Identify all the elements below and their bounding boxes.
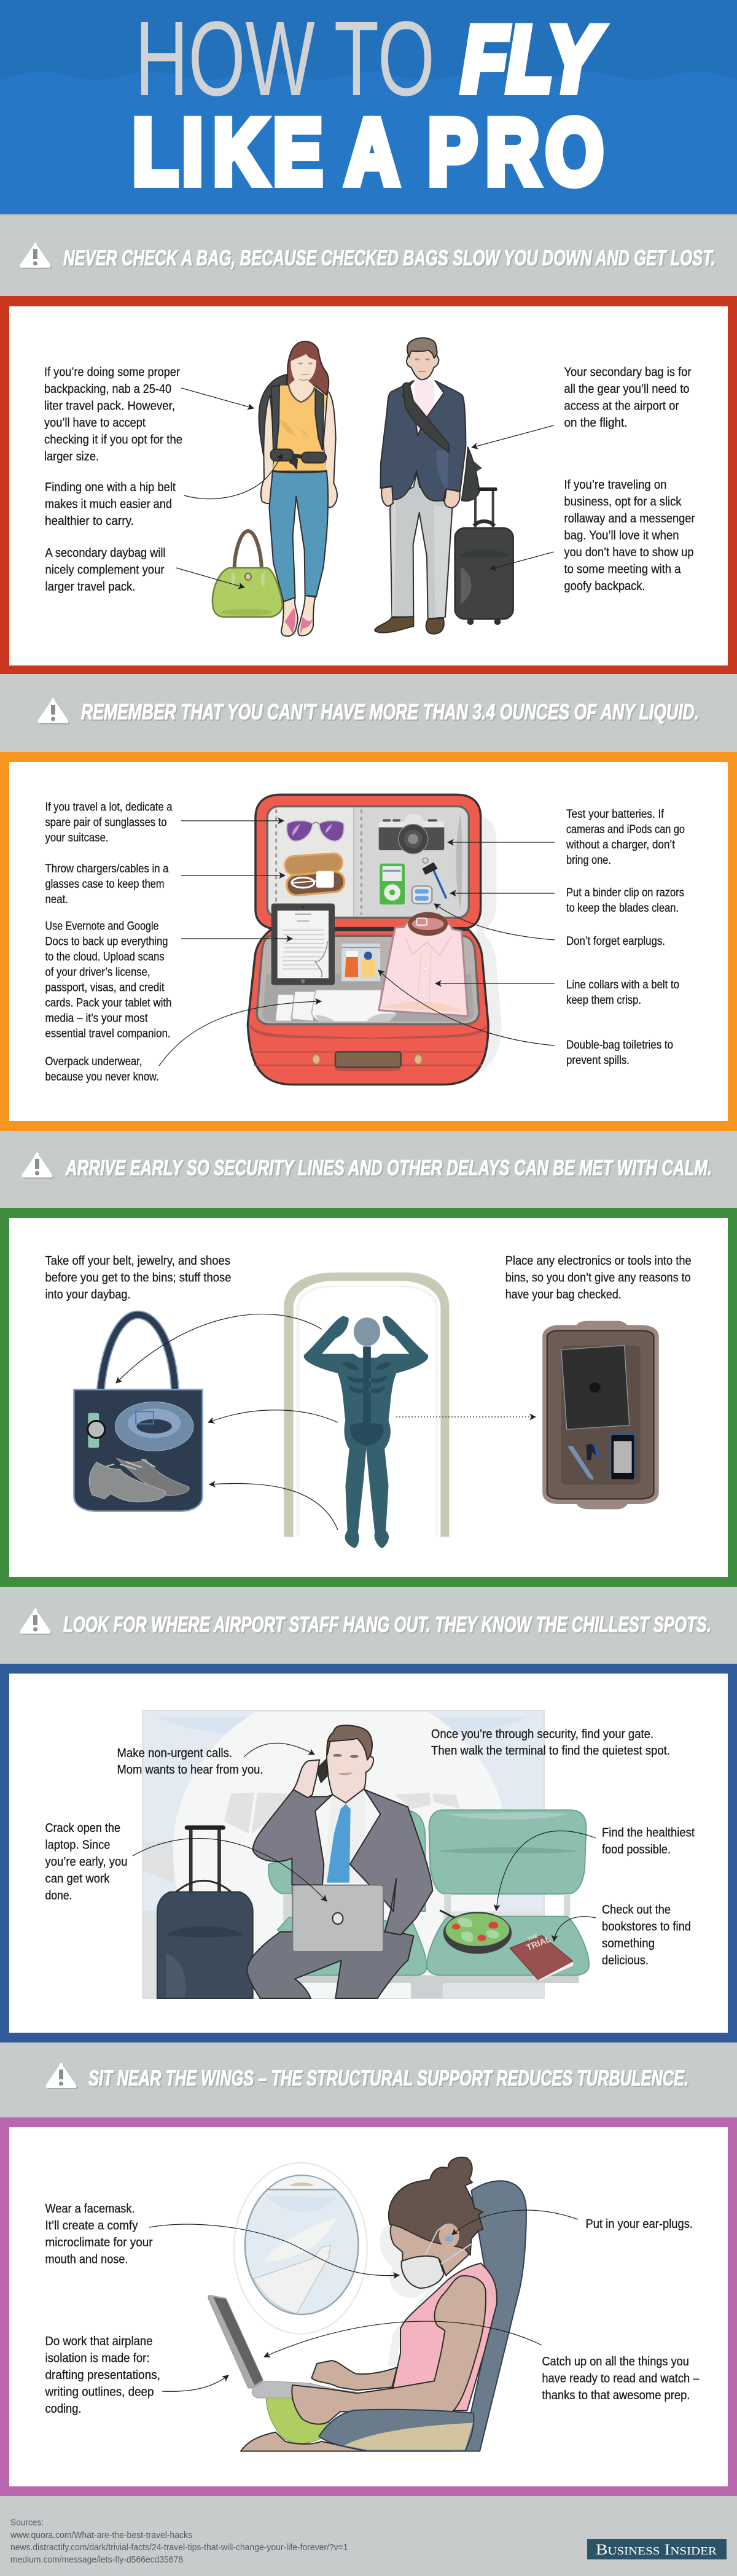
text: chargers tip: Throw chargers/cables in a: [45, 863, 169, 875]
text: sunglasses tip: If you travel a lot, dedicate a: [45, 801, 173, 814]
text: laptop tip: [45, 1821, 128, 1903]
text: cloud backup tip: media – it’s your most: [45, 1012, 148, 1025]
text: laptop tip: Crack open the: [45, 1821, 120, 1835]
text: secondary bag tip: access at the airport or: [564, 399, 679, 413]
text: rollaway tip: bag. You’ll love it when: [564, 529, 679, 543]
text: bookstore tip: something: [602, 1937, 655, 1950]
illustration: security tray with electronics: [542, 1321, 659, 1509]
logo: Business Insider: [587, 2539, 727, 2559]
text: phone calls tip: Mom wants to hear from you.: [117, 1763, 263, 1777]
icon: warning triangle: [20, 1608, 51, 1634]
text: backpack tip: checking it if you opt for the: [44, 433, 182, 447]
navy rollaway suitcase: [157, 1825, 253, 1998]
text: facemask tip: mouth and nose.: [45, 2253, 128, 2267]
book title text: TRIAL: [525, 1934, 552, 1952]
panel: never check a bag: [0, 296, 737, 674]
text: airplane work tip: drafting presentations,: [45, 2368, 160, 2382]
seats: [268, 1810, 589, 1998]
text: underwear tip: because you never know.: [45, 1071, 158, 1084]
text: cloud backup tip: Docs to back up everything: [45, 936, 168, 948]
text: healthy food tip: [602, 1826, 695, 1856]
text: rollaway tip: to some meeting with a: [564, 562, 681, 576]
arrows: panel three callouts: [116, 1314, 536, 1530]
text: airplane work tip: Do work that airplane: [45, 2335, 152, 2348]
text: electronics tip: bins, so you don’t give any reasons to: [505, 1271, 691, 1284]
text: facemask tip: Wear a facemask.: [45, 2202, 135, 2216]
icon: warning triangle: [45, 2063, 77, 2088]
text: collars tip: Line collars with a belt to: [566, 979, 679, 991]
text: bookstore tip: delicious.: [602, 1953, 649, 1967]
sources: medium.com/message/lets-fly-d566ecd35678: [10, 2555, 183, 2565]
text: backpack tip: backpacking, nab a 25-40: [44, 382, 171, 396]
text: find your gate tip: Once you’re through security, find your gate.: [431, 1728, 653, 1741]
text: binder clip tip: Put a binder clip on razors: [566, 886, 684, 899]
text: chargers tip: neat.: [45, 893, 68, 906]
text: catch up tip: thanks to that awesome prep.: [542, 2389, 690, 2402]
panel: terminal: [0, 1664, 737, 2043]
text: bookstore tip: bookstores to find: [602, 1920, 691, 1934]
title: [133, 0, 603, 203]
text: toiletries tip: Double-bag toiletries to: [566, 1039, 673, 1052]
icon: earplugs: [412, 886, 432, 904]
text: airplane work tip: isolation is made for:: [45, 2351, 150, 2365]
text: secondary bag tip: on the flight.: [564, 416, 628, 430]
text: backpack tip: If you’re doing some proper: [44, 366, 180, 379]
illustration: businessman with messenger bag: [375, 338, 513, 634]
text: airplane work tip: coding.: [45, 2402, 81, 2416]
text: toiletries tip: prevent spills.: [566, 1054, 630, 1067]
text: rollaway tip: rollaway and a messenger: [564, 512, 695, 526]
text: catch up tip: [542, 2355, 700, 2402]
text: belt jewelry shoes tip: into your daybag.: [45, 1288, 130, 1302]
panel: security: [0, 1208, 737, 1587]
text: daybag tip: [45, 546, 166, 594]
book title text: THE: [526, 1933, 539, 1942]
terminal window background: [142, 1710, 544, 1998]
arrows: panel five callouts: [149, 2210, 578, 2391]
text: binder clip tip: [566, 886, 684, 915]
text: backpack tip: liter travel pack. However,: [44, 399, 175, 413]
arrows: panel four callouts: [133, 1743, 596, 1941]
text: catch up tip: Catch up on all the things you: [542, 2355, 689, 2368]
text: secondary bag tip: all the gear you’ll need to: [564, 382, 689, 396]
text: rollaway tip: If you’re traveling on: [564, 478, 667, 492]
illustration: open suitcase: [248, 794, 502, 1085]
illustration: scanned skeleton figure: [304, 1316, 428, 1548]
text: cloud backup tip: passport, visas, and credit: [45, 981, 165, 995]
text: belt jewelry shoes tip: [45, 1254, 231, 1302]
text: rollaway tip: [564, 478, 695, 593]
header banner: [0, 0, 737, 215]
text: rollaway tip: business, opt for a slick: [564, 495, 682, 508]
text: backpack tip: larger size.: [44, 450, 99, 464]
sources: www.quora.com/What-are-the-best-travel-hacks: [10, 2530, 192, 2540]
text: secondary bag tip: Your secondary bag is for: [564, 366, 692, 379]
text: backpack tip: you’ll have to accept: [44, 416, 146, 430]
icon: sunglasses: [287, 821, 344, 841]
text: batteries tip: without a charger, don’t: [566, 839, 676, 852]
arrows: panel one callouts: [176, 388, 554, 588]
panel: on the plane: [0, 2117, 737, 2496]
salad bowl: [440, 1911, 512, 1954]
text: facemask tip: [45, 2202, 153, 2267]
title: HOW TO: [135, 0, 435, 118]
text: binder clip tip: to keep the blades clean.: [566, 902, 679, 915]
icon: underwear: [275, 990, 397, 1022]
illustration: terminal scene: [142, 1710, 589, 1998]
text: daybag tip: A secondary daybag will: [45, 546, 166, 560]
text: bookstore tip: [602, 1903, 691, 1967]
text: find your gate tip: [431, 1728, 670, 1758]
text: underwear tip: Overpack underwear,: [45, 1055, 142, 1068]
text: rollaway tip: you don’t have to show up: [564, 546, 694, 559]
text: airplane work tip: [45, 2335, 160, 2416]
text: hip belt tip: makes it much easier and: [45, 497, 172, 511]
text: cloud backup tip: [45, 920, 172, 1040]
illustration: backpacker woman: [259, 341, 337, 636]
text: bookstore tip: Check out the: [602, 1903, 671, 1917]
text: chargers tip: glasses case to keep them: [45, 878, 165, 891]
text: rollaway tip: goofy backpack.: [564, 580, 645, 593]
illustration: tote bag with belt watch shoes: [74, 1315, 203, 1511]
text: laptop tip: you’re early, you: [45, 1855, 128, 1869]
text: airplane work tip: writing outlines, deep: [45, 2386, 154, 2399]
text: phone calls tip: [117, 1747, 263, 1777]
text: catch up tip: have ready to read and watch –: [542, 2372, 700, 2386]
text: sunglasses tip: spare pair of sunglasses to: [45, 817, 167, 829]
text: batteries tip: [566, 808, 685, 867]
text: hip belt tip: [45, 481, 176, 528]
text: laptop tip: laptop. Since: [45, 1838, 111, 1852]
text: find your gate tip: Then walk the terminal to find the quietest spot.: [431, 1744, 670, 1758]
icon: toiletries bag: [341, 944, 380, 981]
sources: [10, 2517, 348, 2565]
text: belt jewelry shoes tip: before you get to the bins; stuff those: [45, 1271, 231, 1284]
text: laptop tip: can get work: [45, 1872, 110, 1886]
text: laptop tip: done.: [45, 1889, 72, 1903]
sources: Sources:: [10, 2517, 44, 2528]
text: cloud backup tip: of your driver’s license,: [45, 966, 150, 979]
text: hip belt tip: healthier to carry.: [45, 514, 134, 528]
arrows: panel two callouts: [159, 821, 555, 1066]
text: facemask tip: It’ll create a comfy: [45, 2219, 138, 2232]
illustration: seated woman with laptop: [208, 2157, 526, 2451]
text: daybag tip: nicely complement your: [45, 564, 165, 577]
text: sunglasses tip: your suitcase.: [45, 831, 108, 845]
icon: camera: [379, 815, 444, 854]
illustration: airplane window: [234, 2163, 367, 2334]
icon: glasses case with cable: [284, 853, 345, 896]
text: healthy food tip: food possible.: [602, 1843, 671, 1856]
book cover: [510, 1936, 573, 1981]
text: electronics tip: [505, 1254, 692, 1302]
icon: warning triangle: [21, 1152, 53, 1177]
title: FLY: [462, 7, 603, 111]
icon: binder clip razor: [422, 858, 446, 898]
sources: news.distractify.com/dark/trivial-facts/24-travel-tips-that-will-change-your-life-forever/?v=1: [10, 2542, 348, 2553]
illustration: body scanner arch: [74, 1273, 659, 1548]
icon: tablet: [271, 904, 335, 985]
text: facemask tip: microclimate for your: [45, 2236, 153, 2249]
text: healthy food tip: Find the healthiest: [602, 1826, 695, 1839]
man in gray suit on phone: [247, 1725, 432, 1998]
icon: pink shirt and belt: [379, 912, 468, 1016]
text: cloud backup tip: essential travel companion.: [45, 1028, 171, 1040]
text: collars tip: [566, 979, 679, 1007]
text: toiletries tip: [566, 1039, 673, 1067]
text: underwear tip: [45, 1055, 158, 1084]
text: chargers tip: [45, 863, 169, 906]
icon: warning triangle: [20, 242, 51, 268]
icon: music player: [380, 864, 405, 904]
text: phone calls tip: Make non-urgent calls.: [117, 1747, 232, 1760]
text: hip belt tip: Finding one with a hip belt: [45, 481, 176, 494]
text: cloud backup tip: cards. Pack your tablet with: [45, 997, 172, 1009]
text: batteries tip: cameras and iPods can go: [566, 823, 685, 836]
text: cloud backup tip: Use Evernote and Google: [45, 920, 158, 933]
text: batteries tip: bring one.: [566, 854, 611, 867]
text: cloud backup tip: to the cloud. Upload scans: [45, 950, 165, 964]
panel: packing: [0, 752, 737, 1131]
text: ear-plugs tip: Put in your ear-plugs.: [586, 2217, 693, 2231]
logo: Business Insider: Business Insider: [596, 2542, 717, 2558]
text: electronics tip: have your bag checked.: [505, 1288, 622, 1302]
illustration: green daybag: [213, 531, 283, 617]
text: daybag tip: larger travel pack.: [45, 580, 135, 594]
text: collars tip: keep them crisp.: [566, 994, 641, 1007]
text: electronics tip: Place any electronics or tools into the: [505, 1254, 692, 1268]
text: sunglasses tip: [45, 801, 173, 845]
text: secondary bag tip: [564, 366, 692, 430]
text: earplugs tip: Don’t forget earplugs.: [566, 935, 665, 948]
text: belt jewelry shoes tip: Take off your belt, jewelry, and shoes: [45, 1254, 230, 1268]
text: backpack tip: [44, 366, 182, 464]
title: LIKE A PRO: [133, 100, 603, 203]
icon: warning triangle: [37, 698, 69, 723]
text: batteries tip: Test your batteries. If: [566, 808, 665, 821]
